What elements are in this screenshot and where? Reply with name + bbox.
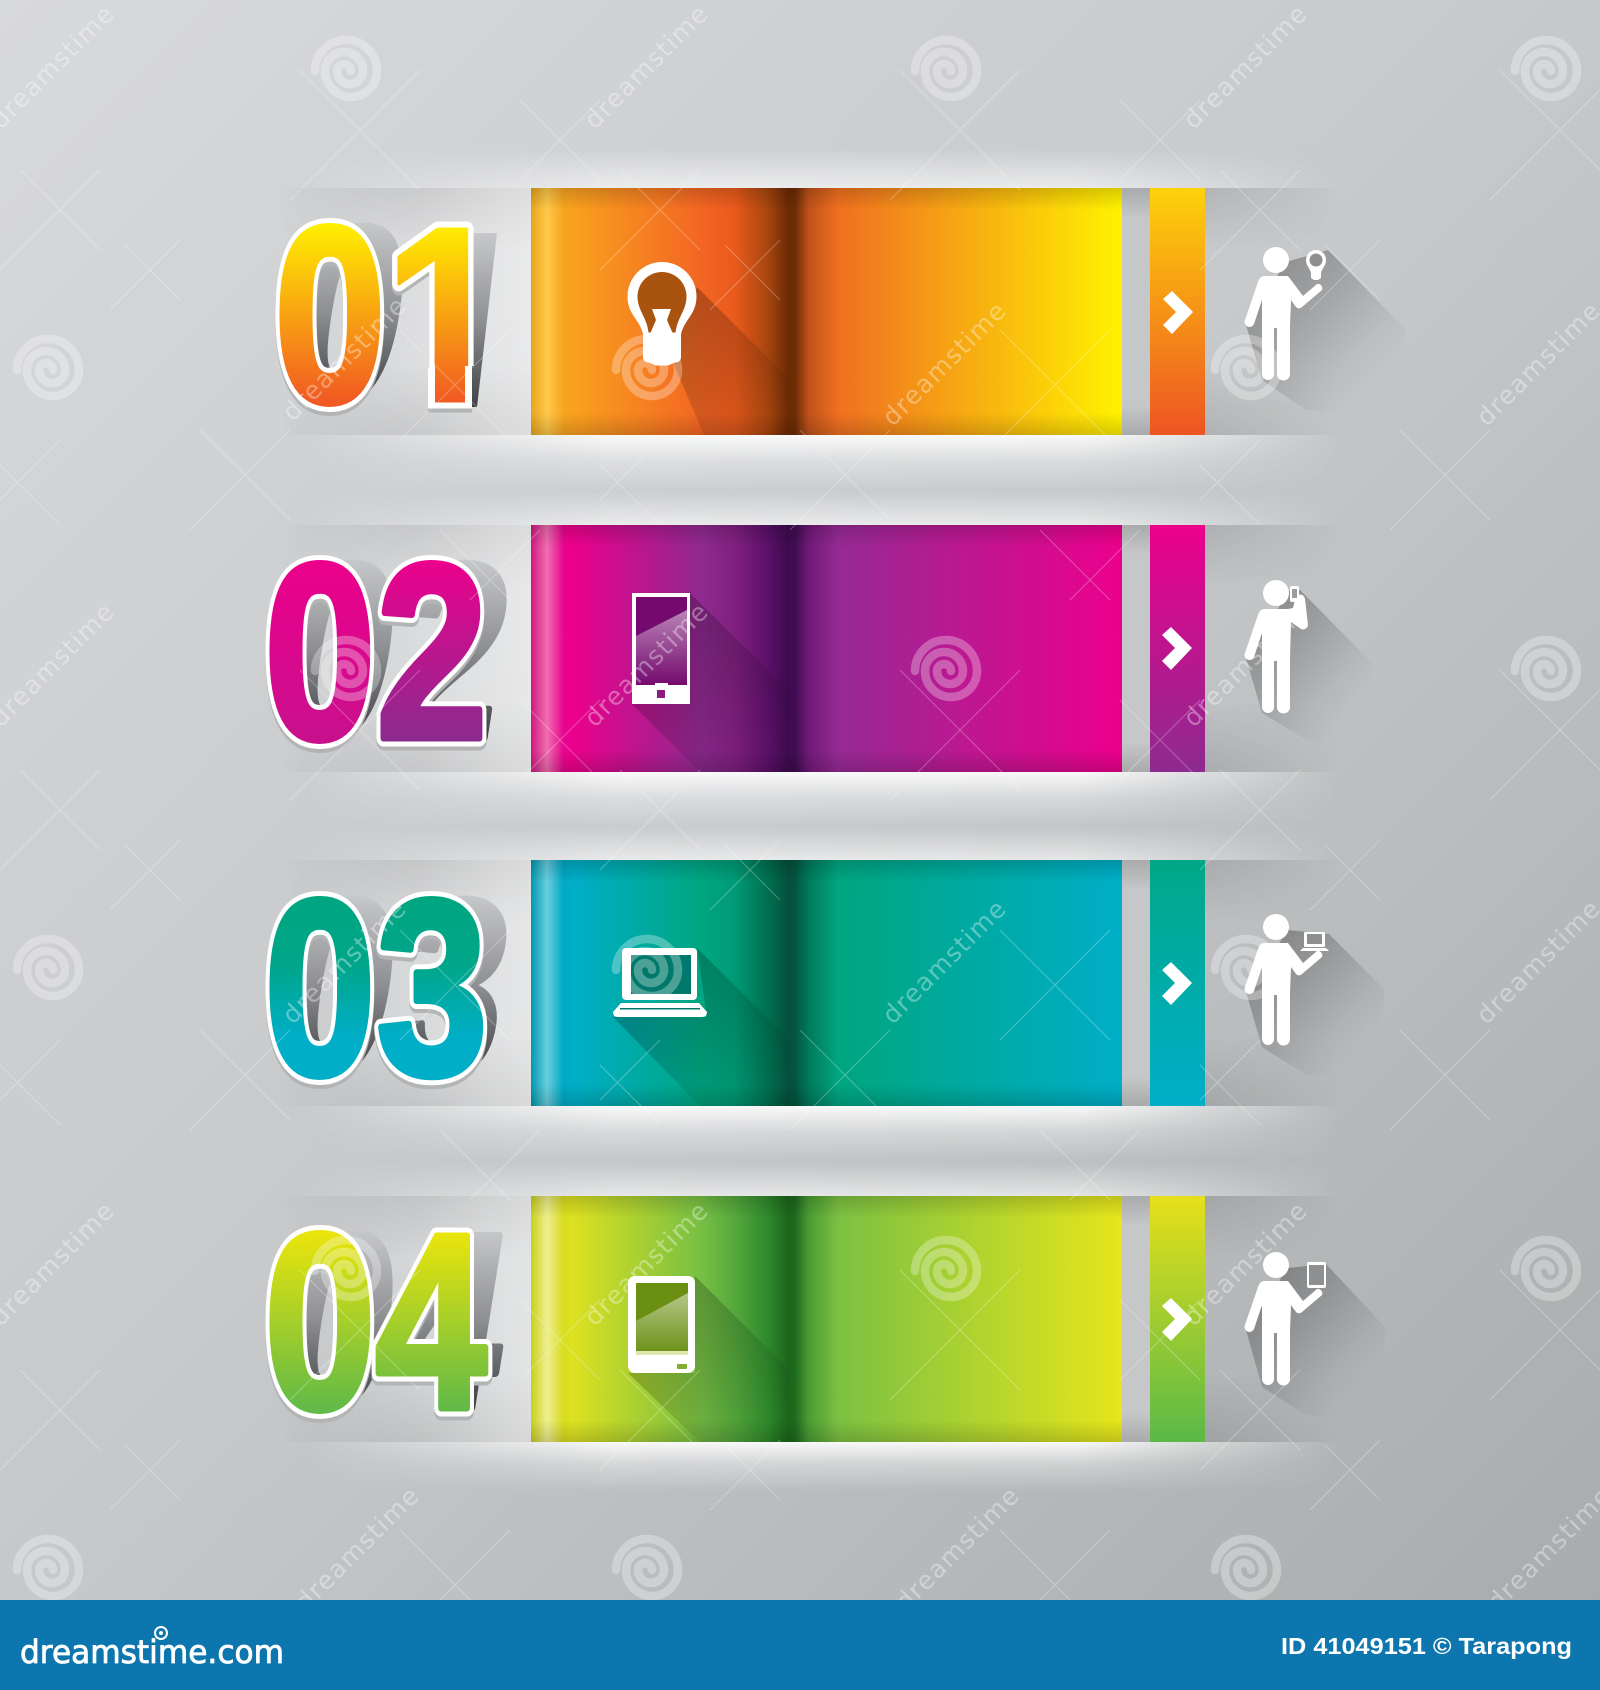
tab [1150, 1196, 1205, 1442]
watermark: text: dreamstime [578, 0, 714, 135]
gap [1122, 188, 1150, 435]
person shadow [1246, 1264, 1386, 1420]
watermark: text: dreamstime [578, 597, 714, 733]
watermark: text: dreamstime [876, 296, 1012, 432]
gap [1122, 860, 1150, 1106]
icon shadow: tablet [628, 1276, 790, 1442]
number 01 [276, 218, 497, 416]
arrow [1162, 627, 1192, 670]
watermark: text: dreamstime [276, 894, 412, 1030]
icon: phone [632, 593, 690, 704]
number 02: 2 [376, 512, 488, 791]
number 03: 3 [376, 852, 488, 1131]
number 02: 0 [264, 516, 376, 795]
tab [1150, 188, 1205, 435]
watermark: text: dreamstime [889, 1481, 1025, 1617]
panel: teal [531, 860, 1122, 1106]
person with bulb [1245, 247, 1326, 380]
person with phone [1245, 580, 1308, 714]
icon shadow: laptop [613, 948, 790, 1106]
gap [1122, 1196, 1150, 1442]
number 02 [261, 512, 528, 795]
person shadow [1246, 250, 1406, 415]
number 01: 1 [383, 176, 509, 455]
band shading behind rows [280, 188, 1340, 1442]
number 04 [261, 1182, 527, 1465]
row 1 [276, 188, 1394, 435]
number 04: 0 [264, 1182, 376, 1461]
person shadow [1246, 930, 1385, 1080]
gap [1122, 525, 1150, 772]
number 01: 1 [383, 176, 509, 455]
number 02: 0 [264, 512, 376, 791]
number 01: 0 [274, 175, 386, 454]
footer credit: ID 41049151 © Tarapong [1281, 1633, 1572, 1659]
arrow [1163, 291, 1193, 334]
number 03: 0 [264, 852, 376, 1131]
number 03: 0 [264, 848, 376, 1127]
number 04: 4 [375, 1182, 487, 1461]
row 3 [261, 848, 1385, 1131]
number 01: 0 [274, 175, 386, 454]
icon: laptop [613, 948, 707, 1017]
icon: light bulb [628, 262, 696, 366]
watermark: text: dreamstime [1177, 597, 1313, 733]
number 01: 0 [274, 179, 386, 458]
number 04: 4 [375, 1182, 487, 1461]
number 04: 4 [372, 1182, 527, 1462]
number 03 [261, 848, 528, 1131]
number 03: 3 [376, 848, 488, 1127]
number 03: 3 [373, 848, 528, 1128]
row 2 [261, 512, 1374, 795]
number 04: 4 [375, 1186, 487, 1465]
number 04: 0 [264, 1186, 376, 1465]
watermark: text: dreamstime [289, 1481, 425, 1617]
watermark: text: dreamstime [1177, 0, 1313, 135]
number 01: 0 [271, 175, 426, 455]
row 4 [261, 1182, 1386, 1465]
number 03: 3 [376, 848, 488, 1127]
watermark: text: dreamstime [876, 894, 1012, 1030]
icon shadow: phone [632, 593, 788, 772]
icon shadow: bulb [672, 287, 788, 435]
watermark: text: dreamstime [578, 1196, 714, 1332]
panel: magenta [531, 525, 1122, 772]
number 02: 2 [373, 512, 528, 792]
arrow [1162, 1298, 1192, 1341]
tab [1150, 525, 1205, 772]
number 03: 0 [264, 848, 376, 1127]
number 02: 0 [261, 512, 416, 792]
icon: tablet [628, 1276, 695, 1373]
number 02: 0 [264, 512, 376, 791]
person with laptop [1245, 914, 1329, 1046]
tab [1150, 860, 1205, 1106]
panel: green [531, 1196, 1122, 1442]
footer logo: dreamstime.com [20, 1633, 284, 1671]
person shadow [1246, 590, 1374, 745]
panel: orange [531, 188, 1122, 435]
white glows around rows [300, 148, 1340, 1492]
number 04: 0 [264, 1182, 376, 1461]
watermark: text: dreamstime [1177, 1196, 1313, 1332]
watermark: text: dreamstime [276, 291, 412, 427]
number 02: 2 [376, 516, 488, 795]
number 01: 1 [383, 180, 509, 459]
person with tablet [1245, 1252, 1326, 1386]
number 02: 2 [376, 512, 488, 791]
number 03: 0 [261, 848, 416, 1128]
number 04: 0 [261, 1182, 416, 1462]
arrow [1162, 962, 1192, 1005]
footer bar [0, 1600, 1600, 1690]
